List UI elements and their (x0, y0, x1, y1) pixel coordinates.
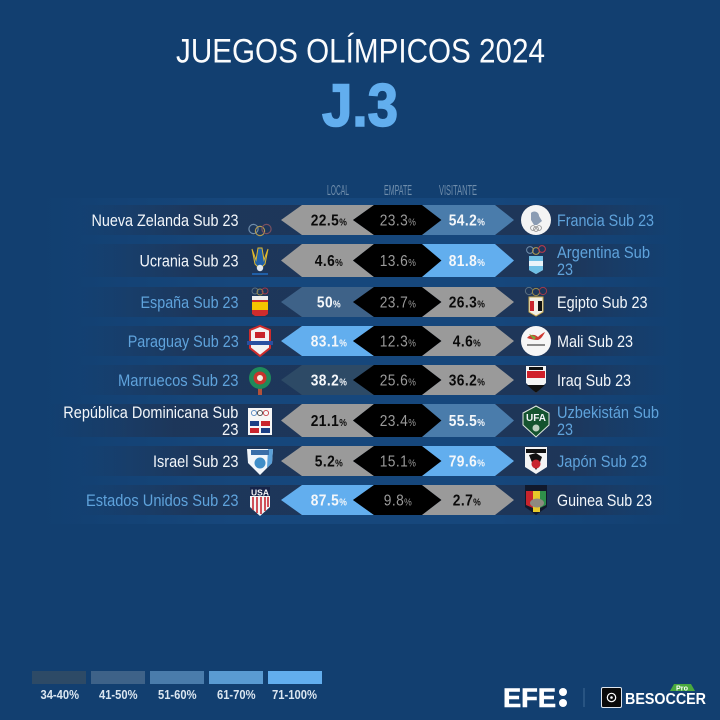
match row: Nueva Zelanda vs Francia: 22.5% (311, 212, 348, 230)
match row: República Dominicana vs Uzbekistán: Uzbekistán Sub (557, 403, 659, 422)
text: VISITANTE (439, 182, 477, 199)
match row: República Dominicana vs Uzbekistán: 55.5% (449, 412, 486, 430)
match row: Ucrania vs Argentina: 13.6% (380, 252, 416, 270)
match row: Israel vs Japón: Japón Sub 23 (557, 452, 647, 471)
match row: Israel vs Japón: Israel Sub 23 (153, 452, 238, 471)
legend: 61-70% (217, 687, 256, 702)
match row: Paraguay vs Mali (80, 326, 670, 356)
match row: Marruecos vs Iraq: Marruecos Sub 23 (118, 371, 238, 390)
icon: Estados Unidos badge (250, 487, 270, 516)
icon: Uzbekistán badge (523, 406, 549, 437)
match row: Ucrania vs Argentina: 4.6% (315, 252, 343, 270)
legend: 34-40% (40, 687, 79, 702)
logo: BeSoccer Pro (602, 684, 706, 708)
match row: República Dominicana vs Uzbekistán: 23 (557, 420, 573, 439)
match row: Paraguay vs Mali: Paraguay Sub 23 (128, 332, 239, 351)
match row: Marruecos vs Iraq: 36.2% (449, 372, 486, 390)
icon: Israel badge (247, 449, 273, 475)
column headers (327, 182, 477, 199)
match row: Israel vs Japón: 15.1% (380, 453, 416, 471)
match row: Paraguay vs Mali: 12.3% (380, 333, 416, 351)
match row: Marruecos vs Iraq: Iraq Sub 23 (557, 371, 631, 390)
logo: BeSoccer Pro: BESOCCER (625, 691, 706, 708)
match row: República Dominicana vs Uzbekistán: 23.4% (380, 412, 416, 430)
match row: Israel vs Japón (80, 446, 670, 476)
match row: República Dominicana vs Uzbekistán (50, 403, 670, 439)
round label J.3: J.3 (322, 72, 398, 139)
match row: República Dominicana vs Uzbekistán: República Dominicana Sub (63, 403, 238, 422)
match row: Nueva Zelanda vs Francia: Francia Sub 23 (557, 211, 654, 230)
icon: Nueva Zelanda olympic rings (249, 224, 271, 236)
logo: EFE: EFE (503, 683, 556, 713)
icon: España badge (252, 288, 268, 316)
match row: Paraguay vs Mali: 83.1% (311, 333, 348, 351)
match row: Nueva Zelanda vs Francia: Nueva Zelanda Sub 23 (92, 211, 238, 230)
match row: Ucrania vs Argentina: Argentina Sub (557, 243, 650, 262)
match row: Marruecos vs Iraq: 25.6% (380, 372, 416, 390)
match row: Israel vs Japón: 79.6% (449, 453, 486, 471)
icon: Mali badge (521, 326, 551, 356)
legend: 71-100% (272, 687, 317, 702)
icon: Iraq badge (526, 366, 546, 393)
icon: Francia badge (521, 205, 551, 235)
match row: Israel vs Japón: 5.2% (315, 453, 343, 471)
match row: Nueva Zelanda vs Francia: 54.2% (449, 212, 486, 230)
match row: Estados Unidos vs Guinea: Estados Unidos Sub 23 (86, 491, 238, 510)
match row: Estados Unidos vs Guinea: Guinea Sub 23 (557, 491, 652, 510)
icon: Marruecos badge (249, 367, 271, 395)
icon: República Dominicana badge (248, 408, 272, 435)
icon: Uzbekistán badge: UFA (526, 413, 546, 424)
column headers: LOCAL (327, 182, 349, 199)
match row: España vs Egipto: Egipto Sub 23 (557, 293, 648, 312)
legend: 51-60% (158, 687, 197, 702)
match row: España vs Egipto: 26.3% (449, 294, 486, 312)
icon: Estados Unidos badge: USA (251, 488, 269, 498)
match row: Estados Unidos vs Guinea (80, 485, 670, 516)
match row: Marruecos vs Iraq: 38.2% (311, 372, 348, 390)
match row: Estados Unidos vs Guinea: 9.8% (384, 492, 412, 510)
legend (32, 671, 322, 702)
match row: Estados Unidos vs Guinea: 2.7% (453, 492, 481, 510)
legend: 41-50% (99, 687, 138, 702)
match row: Nueva Zelanda vs Francia: 23.3% (380, 212, 416, 230)
match row: Paraguay vs Mali: 4.6% (453, 333, 481, 351)
match row: España vs Egipto: España Sub 23 (140, 293, 238, 312)
icon: Guinea badge (525, 485, 547, 515)
match row: República Dominicana vs Uzbekistán: 23 (222, 420, 238, 439)
match row: Nueva Zelanda vs Francia (80, 205, 670, 236)
match row: Ucrania vs Argentina: 23 (557, 260, 573, 279)
match row: Paraguay vs Mali: Mali Sub 23 (557, 332, 633, 351)
icon: Egipto badge (525, 287, 547, 316)
match row: España vs Egipto: 50% (317, 294, 341, 312)
column headers: EMPATE (384, 182, 412, 199)
match row: Ucrania vs Argentina (80, 243, 670, 279)
logo: BeSoccer Pro: Pro (676, 686, 688, 692)
match row: España vs Egipto: 23.7% (380, 294, 416, 312)
icon: Japón badge (525, 447, 547, 474)
match row: República Dominicana vs Uzbekistán: 21.1% (311, 412, 348, 430)
match row: España vs Egipto (80, 287, 670, 317)
icon: Ucrania trident (252, 248, 268, 275)
match row: Ucrania vs Argentina: 81.8% (449, 252, 486, 270)
title: JUEGOS OLÍMPICOS 2024 (176, 32, 545, 70)
match row: Ucrania vs Argentina: Ucrania Sub 23 (140, 252, 238, 270)
icon: Paraguay badge (247, 326, 273, 356)
match row: Marruecos vs Iraq (80, 365, 670, 395)
match row: Estados Unidos vs Guinea: 87.5% (311, 492, 348, 510)
icon: Argentina badge (527, 246, 545, 274)
